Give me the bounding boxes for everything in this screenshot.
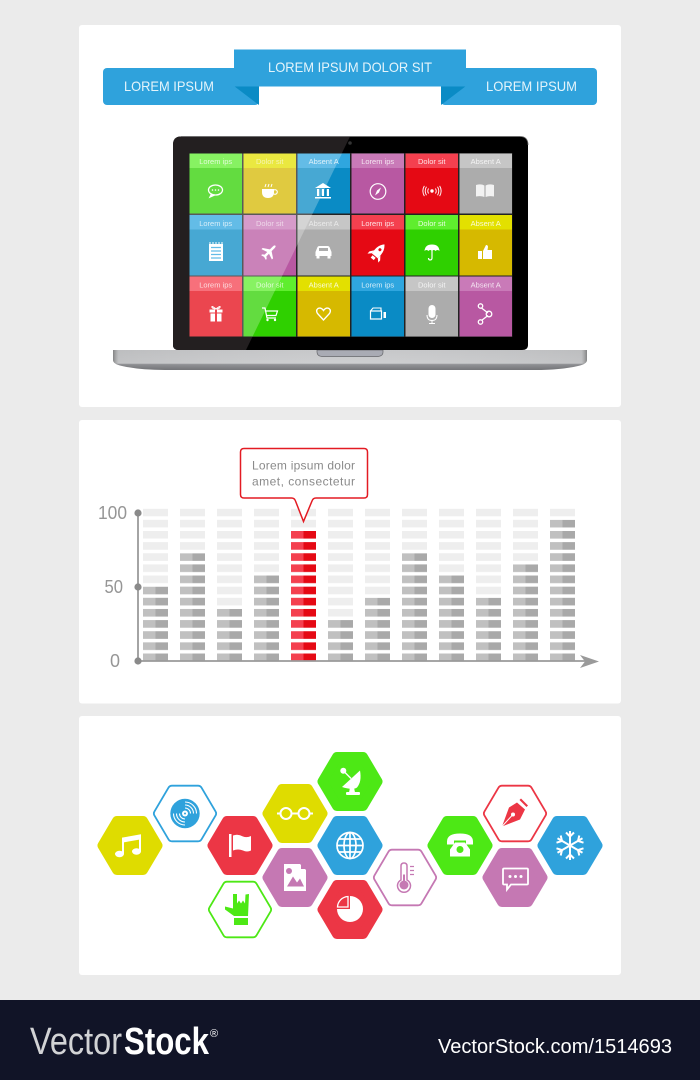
- laptop: [113, 136, 587, 370]
- tile: video camera: [352, 276, 404, 336]
- hexagon: satellite dish: [322, 757, 378, 806]
- hexagon: image file: [268, 853, 322, 902]
- tile: share: [460, 276, 512, 336]
- tile: rocket: [352, 215, 404, 276]
- hexagon: rock hand: [213, 886, 267, 933]
- panel: equalizer chart: [79, 420, 621, 704]
- tile: plane: [244, 215, 296, 276]
- VectorStock logo: Vector: [30, 1021, 122, 1063]
- ribbon right fold: [441, 86, 466, 105]
- tile: video camera: Lorem ips: [361, 280, 394, 290]
- axes: [134, 509, 599, 668]
- footer band: [0, 1000, 700, 1080]
- ribbon left tab: LOREM IPSUM: [124, 78, 214, 94]
- hexagon: glasses: [268, 789, 322, 838]
- tile: cart: Dolor sit: [256, 280, 284, 290]
- tile: cart: [244, 276, 296, 336]
- y axis labels: [98, 503, 127, 671]
- tile: umbrella: Dolor sit: [418, 219, 446, 228]
- tile: microphone: Dolor sit: [418, 280, 446, 290]
- tile: thumb up: [460, 215, 512, 276]
- hexagon: flag: [212, 821, 268, 870]
- hexagon: chat bubble: [488, 853, 542, 902]
- VectorStock logo: [30, 1021, 218, 1063]
- tile: umbrella: [406, 215, 458, 276]
- ribbon left fold: [234, 86, 259, 105]
- callout: amet, consectetur: [252, 474, 355, 488]
- tile: thumb up: Absent A: [471, 219, 501, 228]
- tile: car: Absent A: [309, 219, 339, 228]
- ribbon center band: [234, 50, 466, 86]
- y axis labels: 50: [104, 577, 123, 597]
- callout: Lorem ipsum dolor: [252, 458, 355, 472]
- empty bar tracks: [143, 509, 576, 662]
- tile: microphone: [406, 276, 458, 336]
- tile: plane: Dolor sit: [256, 219, 284, 228]
- ribbon right tab: [441, 68, 597, 105]
- VectorStock logo: ®: [210, 1028, 218, 1040]
- tile: compass: [352, 154, 404, 214]
- ribbon banner: [103, 50, 597, 105]
- tile: signal: [406, 154, 458, 214]
- tile: car: [298, 215, 350, 276]
- ribbon right tab: LOREM IPSUM: [486, 78, 577, 94]
- image id text: VectorStock.com/1514693: [438, 1036, 672, 1058]
- tile: bank: Absent A: [309, 157, 339, 166]
- hexagon: thermometer: [378, 854, 432, 901]
- y axis labels: 0: [110, 651, 120, 671]
- panel: hexagon icons: [79, 716, 621, 975]
- tile: signal: Dolor sit: [418, 157, 446, 166]
- tile: book: Absent A: [471, 157, 501, 166]
- tile: notepad: [190, 215, 242, 276]
- tile: heart: Absent A: [309, 280, 339, 290]
- tile: chat: Lorem ips: [199, 157, 232, 166]
- tile: heart: [298, 276, 350, 336]
- hexagon: vinyl: [158, 790, 212, 837]
- hexagon: globe: [322, 821, 378, 870]
- tile: share: Absent A: [471, 280, 501, 290]
- y axis labels: 100: [98, 503, 127, 523]
- tile: gift: Lorem ips: [199, 280, 232, 290]
- hexagon: music: [102, 821, 158, 870]
- tile: gift: [190, 276, 242, 336]
- highlighted red bar: [291, 531, 316, 662]
- ribbon left tab: [103, 68, 259, 105]
- hexagon: pen nib: [488, 790, 542, 837]
- hexagon: snowflake: [542, 821, 598, 870]
- tile: rocket: Lorem ips: [361, 219, 394, 228]
- tile: book: [460, 154, 512, 214]
- tile: coffee: [244, 154, 296, 214]
- VectorStock logo: Stock: [124, 1021, 210, 1063]
- hexagon: pie chart: [322, 885, 378, 934]
- ribbon center band: LOREM IPSUM DOLOR SIT: [268, 59, 432, 75]
- tile: notepad: Lorem ips: [199, 219, 232, 228]
- tile: chat: [190, 154, 242, 214]
- laptop bezel: [173, 136, 528, 350]
- filled bars: [143, 520, 575, 662]
- callout: [240, 448, 368, 522]
- tile: coffee: Dolor sit: [256, 157, 284, 166]
- screen tile grid: [189, 153, 512, 337]
- screen gloss: [190, 154, 342, 336]
- panel: laptop and ribbon: [79, 25, 621, 407]
- hexagon: telephone: [432, 821, 488, 870]
- tile: bank: [298, 154, 350, 214]
- laptop base: [113, 350, 587, 370]
- tile: compass: Lorem ips: [361, 157, 394, 166]
